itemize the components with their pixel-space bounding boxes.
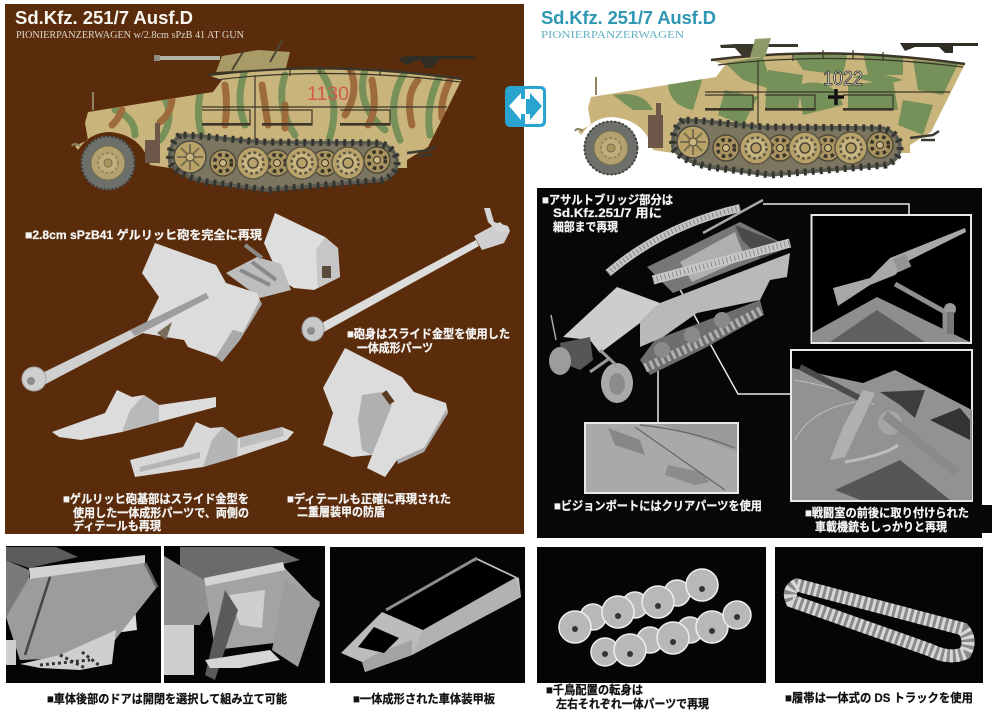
panel: brown gun panel [5, 4, 524, 534]
caption: machine guns: ■戦闘室の前後に取り付けられた [805, 505, 969, 520]
inset: MG42 on mount [812, 215, 971, 343]
caption: road wheels: 左右それぞれ一体パーツで再現 [556, 696, 709, 711]
inset: pintle MG [791, 350, 972, 501]
title: gun variant: Sd.Kfz. 251/7 Ausf.D [15, 7, 193, 28]
caption: 2.8cm gun: ■2.8cm sPzB41 ゲルリッヒ砲を完全に再現 [25, 227, 262, 242]
caption: assault bridge [542, 192, 673, 234]
balkenkreuz marking [828, 89, 844, 105]
icon: double arrow badge [505, 86, 546, 127]
subtitle: gun variant: PIONIERPANZERWAGEN w/2.8cm sPzB 41 AT GUN [16, 30, 244, 41]
photo panel: rear doors open [164, 546, 325, 683]
caption: assault bridge: ■アサルトブリッジ部分は [542, 192, 673, 207]
caption: shield: ■ディテールも正確に再現された [287, 491, 451, 506]
caption: shield: 二重層装甲の防盾 [297, 504, 385, 519]
caption: vision port: ■ビジョンポートにはクリアパーツを使用 [554, 498, 762, 513]
inset: vision port close-up [585, 423, 738, 493]
model render: assault bridge half-track [549, 200, 790, 403]
photo panel: one-piece hull armor [330, 547, 525, 683]
caption: hull armor: ■一体成形された車体装甲板 [353, 691, 495, 706]
caption: machine guns [805, 505, 969, 534]
double-layer armoured shield part [323, 348, 448, 477]
caption: gun base: 使用した一体成形パーツで、両側の [73, 505, 249, 520]
photo panel: rear doors closed [6, 546, 161, 683]
caption: assault bridge: Sd.Kfz.251/7 用に [553, 206, 662, 220]
rear machine gun [398, 56, 475, 68]
caption: assault bridge: 細部まで再現 [553, 219, 618, 234]
anti-tank gun barrel [154, 41, 290, 72]
gun mount trail part 1 [52, 390, 216, 440]
caption: barrel part: 一体成形パーツ [357, 340, 433, 355]
gun barrel part [302, 208, 510, 341]
caption: shield [287, 491, 451, 519]
rear machine gun [900, 43, 978, 53]
caption: gun base: ■ゲルリッヒ砲基部はスライド金型を [63, 491, 249, 506]
caption: gun base: ディテールも再現 [73, 518, 161, 533]
caption: barrel part: ■砲身はスライド金型を使用した [347, 326, 510, 341]
title: plain variant: Sd.Kfz. 251/7 Ausf.D [541, 7, 716, 28]
gun assembly: barrel and split shields [22, 213, 340, 391]
caption: rear doors: ■車体後部のドアは開閉を選択して組み立て可能 [47, 691, 287, 706]
caption: barrel part [347, 326, 510, 355]
callout lines [658, 204, 909, 424]
caption: road wheels [546, 682, 709, 711]
photo panel: road wheels [537, 547, 766, 683]
caption: road wheels: ■千鳥配置の転身は [546, 682, 643, 697]
hull number 1130: 1130 [307, 84, 349, 105]
vehicle profile: stripe camouflage half-track [72, 41, 475, 190]
panel: black detail panel [537, 188, 992, 538]
gun mount trail part 2 [130, 422, 294, 477]
vehicle profile: blotch camouflage half-track [575, 38, 978, 175]
subtitle: plain variant: PIONIERPANZERWAGEN [541, 30, 684, 41]
caption: track: ■履帯は一体式の DS トラックを使用 [785, 690, 973, 705]
photo panel: one-piece track [775, 547, 983, 683]
caption: gun base [63, 491, 249, 533]
front machine gun [720, 38, 798, 57]
caption: machine guns: 車載機銃もしっかりと再現 [815, 519, 947, 534]
hull number 1022: 1022 [823, 68, 863, 90]
